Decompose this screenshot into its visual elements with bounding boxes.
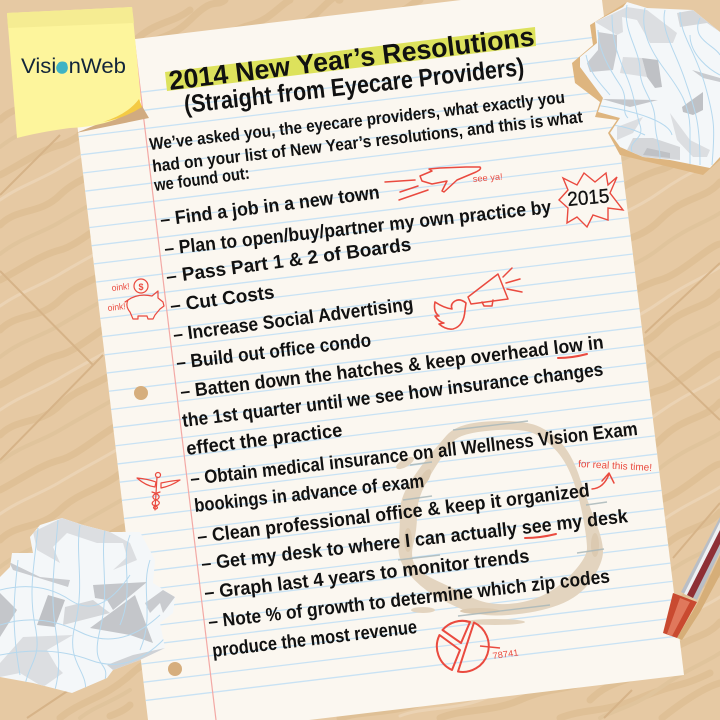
arrow: for real this time [592, 473, 614, 489]
pie chart label: 78741 [492, 647, 519, 661]
intro text block: we found out: [152, 164, 251, 195]
resolutions list: – Graph last 4 years to monitor trends [203, 546, 530, 604]
underline: see [525, 534, 556, 538]
crumpled paper: bottom left [0, 518, 175, 695]
icon: piggy bank with coin: $ [138, 282, 144, 292]
resolutions list: bookings in advance of exam [193, 471, 425, 517]
resolutions list: – Get my desk to where I can actually see my desk [200, 506, 629, 575]
coffee ring stain [394, 421, 607, 625]
underline: low [558, 354, 587, 358]
resolutions list: – Note % of growth to determine which zip codes [207, 566, 611, 633]
resolutions list: produce the most revenue [211, 617, 418, 662]
icon: piggy bank with coin: oink! [107, 301, 126, 313]
intro text block [148, 88, 584, 195]
icon: piggy bank with coin: oink! [111, 281, 130, 293]
ballpoint pen [663, 517, 720, 640]
resolutions list: – Pass Part 1 & 2 of Boards [165, 234, 412, 288]
icon: caduceus [137, 472, 180, 510]
icon: twitter bird with megaphone [434, 268, 522, 329]
intro text block: had on your list of New Year’s resolutions, and this is what [151, 107, 584, 176]
title highlight [165, 27, 536, 91]
icon: piggy bank with coin [107, 279, 164, 319]
resolutions list: – Clean professional office & keep it organized [196, 480, 591, 548]
resolutions list: – Build out office condo [175, 330, 372, 374]
resolutions list: – Find a job in a new town [159, 182, 381, 231]
icon: pie chart [437, 621, 500, 672]
starburst: 2015: 2015 [567, 185, 610, 211]
resolutions list: the 1st quarter until we see how insurance changes [181, 359, 604, 432]
starburst: 2015 [559, 173, 623, 227]
resolutions list: – Plan to open/buy/partner my own practice by [163, 197, 553, 260]
intro text block: We’ve asked you, the eyecare providers, what exactly you [148, 88, 566, 154]
logo: VisionWeb: VisionWeb [21, 55, 126, 78]
icon: airplane with speed lines [385, 167, 480, 200]
resolutions list: – Increase Social Advertising [172, 294, 415, 346]
resolutions list [159, 182, 639, 662]
see ya note: see ya! [472, 171, 503, 184]
for real this time note: for real this time! [578, 459, 652, 474]
subtitle: (Straight from Eyecare Providers) [183, 53, 526, 119]
title: 2014 New Year’s Resolutions [167, 21, 536, 96]
resolutions list: – Obtain medical insurance on all Wellness Vision Exam [189, 419, 639, 490]
resolutions list: – Batten down the hatches & keep overhead low in [179, 332, 605, 403]
sticky note [7, 7, 149, 138]
crumpled paper: top right [572, 2, 720, 175]
resolutions list: – Cut Costs [169, 282, 276, 317]
resolutions list: effect the practice [185, 420, 343, 460]
